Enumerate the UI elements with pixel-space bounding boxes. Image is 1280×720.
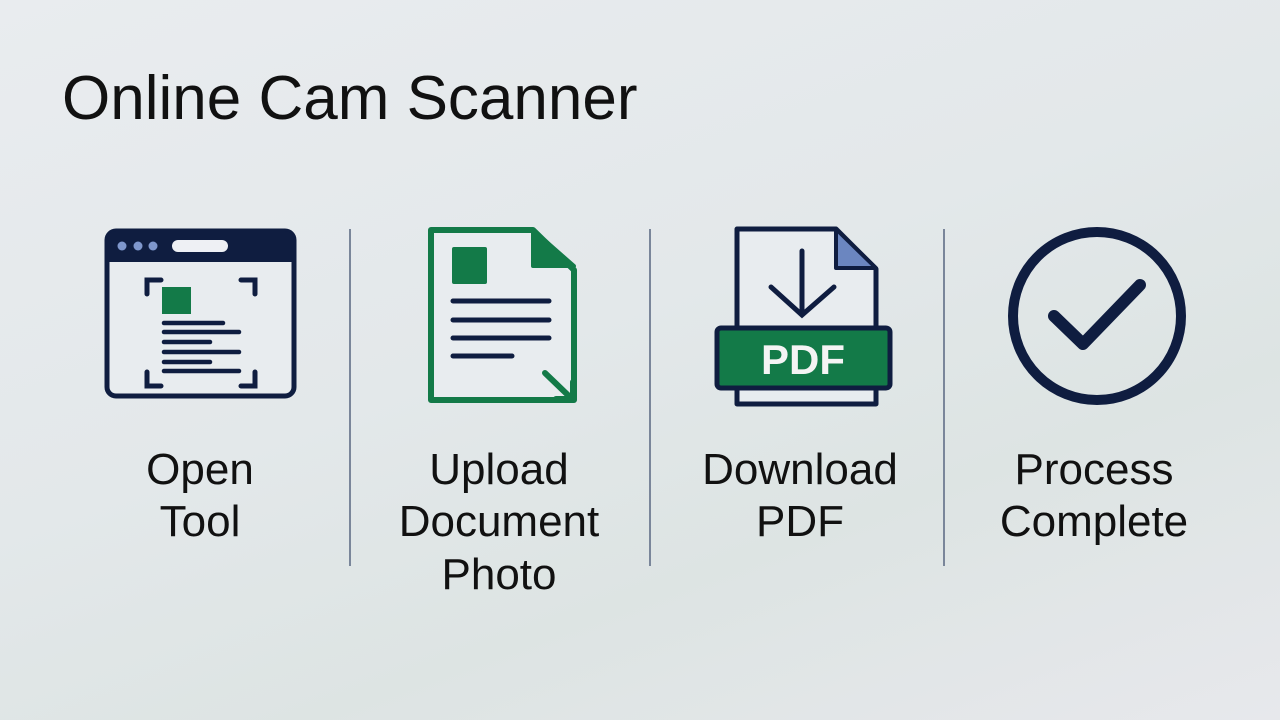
title: Online Cam Scanner [62,64,638,133]
icon: upload document [431,230,574,400]
icon: check circle [1013,232,1181,400]
label: upload document photo: Photo [442,550,556,599]
icon: download pdf: PDF [761,336,845,383]
label: upload document photo: Upload [429,445,569,494]
divider [349,229,351,566]
divider [943,229,945,566]
label: download pdf: Download [702,445,898,494]
icon: browser scanner [107,231,294,396]
label: upload document photo: Document [399,497,599,546]
label: download pdf: PDF [756,497,844,546]
label: open tool: Tool [160,497,240,546]
label: process complete: Complete [1000,497,1188,546]
label: open tool: Open [146,445,254,494]
icon: download pdf [717,229,890,404]
divider [649,229,651,566]
label: process complete: Process [1015,445,1173,494]
